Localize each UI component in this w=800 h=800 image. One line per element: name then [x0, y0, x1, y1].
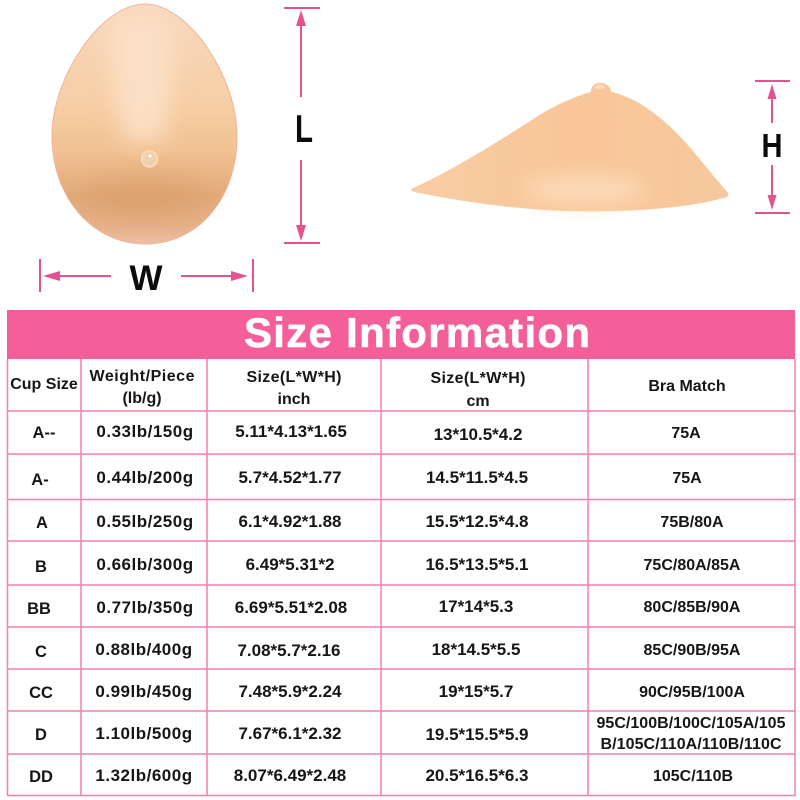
row: A-: 0.44lb/200g: [96, 468, 194, 487]
table grid: [7, 359, 795, 796]
row: D: 95C/100B/100C/105A/105: [596, 715, 786, 732]
row: CC: 7.48*5.9*2.24: [238, 682, 342, 701]
arrow: height dimension: [755, 80, 790, 214]
icon: front view of silicone form: [52, 4, 237, 244]
row: A-: A-: [31, 471, 49, 489]
label: W: W: [129, 259, 163, 298]
title banner: [7, 309, 795, 359]
row: CC: 19*15*5.7: [439, 682, 513, 701]
row: A: A: [36, 514, 48, 532]
row: B: 0.66lb/300g: [96, 555, 194, 574]
header row: inch: [278, 391, 310, 408]
row: B: [35, 555, 741, 576]
row: BB: 80C/85B/90A: [644, 599, 741, 616]
row: C: 85C/90B/95A: [644, 642, 741, 659]
row: BB: 0.77lb/350g: [96, 598, 194, 617]
row: D: B/105C/110A/110B/110C: [600, 736, 782, 753]
row: A--: A--: [33, 424, 55, 442]
row: A--: 75A: [671, 425, 701, 442]
row: B: 6.49*5.31*2: [246, 555, 334, 574]
header row: Bra Match: [648, 378, 726, 395]
row: DD: 105C/110B: [653, 768, 733, 785]
row: A--: 0.33lb/150g: [96, 422, 194, 441]
row: D: 7.67*6.1*2.32: [238, 724, 342, 743]
row: BB: [27, 597, 741, 618]
row: D: D: [35, 726, 47, 744]
header row: cm: [466, 393, 490, 410]
row: D: 19.5*15.5*5.9: [425, 725, 529, 744]
row: CC: 90C/95B/100A: [639, 684, 745, 701]
row: A--: 13*10.5*4.2: [434, 425, 522, 444]
row: A: 6.1*4.92*1.88: [238, 512, 342, 531]
row: DD: [29, 766, 733, 786]
header row: Size(L*W*H): [246, 369, 342, 386]
row: A-: 14.5*11.5*4.5: [426, 468, 528, 487]
row: A--: 5.11*4.13*1.65: [235, 422, 347, 441]
row: DD: DD: [29, 768, 53, 786]
header row: Cup Size: [10, 376, 78, 393]
row: B: 75C/80A/85A: [644, 557, 741, 574]
row: A: 75B/80A: [660, 514, 724, 531]
row: BB: 17*14*5.3: [439, 597, 513, 616]
icon: side view of silicone form: [412, 83, 728, 211]
row: C: 0.88lb/400g: [95, 640, 193, 659]
size table: [7, 309, 795, 796]
row: CC: 0.99lb/450g: [95, 682, 193, 701]
row: A-: 75A: [672, 470, 702, 487]
row: D: [35, 715, 786, 753]
row: B: 16.5*13.5*5.1: [425, 555, 529, 574]
row: C: 7.08*5.7*2.16: [237, 641, 341, 660]
title banner: Size Information: [244, 309, 590, 356]
row: A--: [33, 422, 701, 444]
row: A: 0.55lb/250g: [96, 512, 194, 531]
row: BB: 6.69*5.51*2.08: [235, 598, 347, 617]
label: L: L: [295, 108, 313, 151]
row: CC: [29, 682, 745, 702]
arrow: length dimension: [284, 7, 320, 244]
row: DD: 20.5*16.5*6.3: [425, 766, 529, 785]
header row: Weight/Piece: [90, 368, 195, 385]
row: DD: 1.32lb/600g: [95, 766, 193, 785]
header row: [10, 368, 726, 410]
row: D: 1.10lb/500g: [95, 724, 193, 743]
row: A: 15.5*12.5*4.8: [425, 512, 529, 531]
row: C: C: [35, 643, 47, 661]
row: C: [35, 640, 741, 661]
label: H: H: [762, 127, 782, 164]
row: DD: 8.07*6.49*2.48: [234, 766, 346, 785]
row: C: 18*14.5*5.5: [432, 640, 520, 659]
row: A-: [31, 468, 702, 489]
header row: (lb/g): [122, 390, 162, 407]
row: B: B: [35, 558, 47, 576]
row: A: [36, 512, 724, 532]
header row: Size(L*W*H): [430, 370, 526, 387]
arrow: width dimension: [39, 259, 254, 292]
row: BB: BB: [27, 600, 51, 618]
row: A-: 5.7*4.52*1.77: [238, 468, 342, 487]
row: CC: CC: [29, 684, 53, 702]
